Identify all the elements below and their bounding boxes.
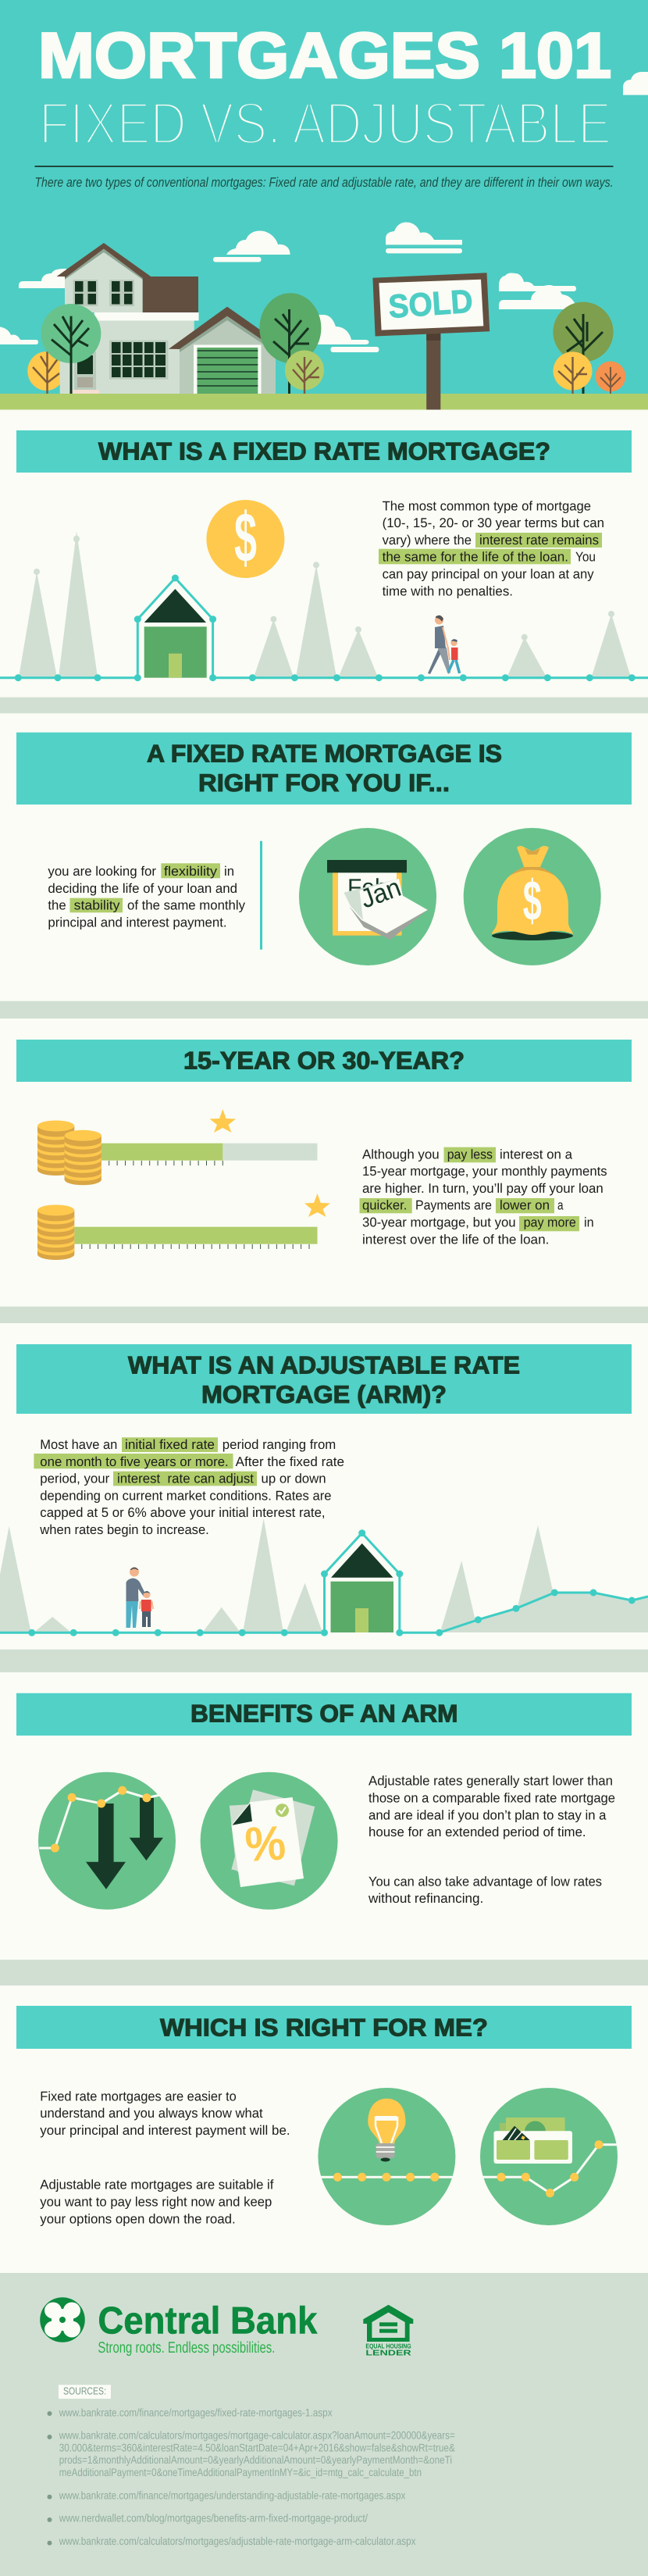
text: ARM benefits: without refinancing. [368, 1891, 483, 1906]
icon: percent document [201, 1772, 338, 1910]
text: fixed rate description: The most common type of mortgage [383, 498, 591, 513]
text: fixed vs adjustable advice [40, 2089, 290, 2226]
sources list: www.bankrate.com/finance/mortgages/fixed-rate-mortgages-1.aspx [59, 2406, 333, 2418]
icon: light bulb with flat line [318, 2088, 455, 2225]
text: ARM description: capped at 5 or 6% above your initial interest rate, [40, 1505, 326, 1520]
sources list: www.bankrate.com/finance/mortgages/understanding-adjustable-rate-mortgages.aspx [59, 2489, 405, 2501]
text: 15 vs 30 year comparison: interest on a [500, 1147, 573, 1161]
icon: star [209, 1109, 236, 1133]
ground [0, 394, 648, 409]
text: 15 vs 30 year comparison: are higher. In turn, you’ll pay off your loan [362, 1181, 603, 1196]
front door [73, 351, 99, 394]
text: fixed rate description: the same for the life of the loan. [383, 550, 568, 565]
panel: benefits of an ARM [16, 1693, 632, 1910]
text: ARM benefits: and are ideal if you don’t plan to stay in a [369, 1807, 607, 1822]
heading: WHICH IS RIGHT FOR ME? [160, 2014, 488, 2042]
icon: house [325, 1533, 400, 1632]
text: 15 vs 30 year comparison: interest over the life of the loan. [362, 1232, 549, 1247]
heading: MORTGAGE (ARM)? [201, 1380, 447, 1408]
icon: adult and child standing [126, 1567, 153, 1628]
text: ARM benefits [368, 1774, 615, 1906]
text: 15 vs 30 year comparison: quicker. [362, 1198, 407, 1213]
text: 15 vs 30 year comparison: in [584, 1215, 594, 1229]
text: fixed rate description: interest rate remains [479, 533, 599, 548]
text: fixed vs adjustable advice: you want to pay less right now and keep [40, 2195, 272, 2209]
icon: adult and child walking [428, 615, 460, 674]
panel: fixed rate is right for you if [16, 733, 632, 965]
panel: footer [0, 2273, 648, 2576]
icon: gold dollar coin: $ [234, 499, 257, 577]
text: fixed rate description: vary) where the [383, 533, 472, 548]
chart: adjustable rate line with peaks [0, 1518, 648, 1636]
heading: A FIXED RATE MORTGAGE IS [147, 740, 502, 768]
text: flexibility and stability: deciding the life of your loan and [48, 881, 237, 896]
chart: 30-year bar [37, 1193, 330, 1260]
lower window [109, 341, 168, 380]
text: 15 vs 30 year comparison: 30-year mortgage, but you [362, 1215, 516, 1229]
logo: equal housing lender [363, 2305, 413, 2357]
icon: wallet with adjustable line [480, 2088, 618, 2225]
sources list: www.bankrate.com/calculators/mortgages/mortgage-calculator.aspx?loanAmount=200000&years= [59, 2429, 455, 2442]
text: ARM description: initial fixed rate [125, 1437, 215, 1452]
title: MORTGAGES 101 [38, 20, 611, 91]
panel: what is an adjustable rate mortgage [0, 1344, 648, 1636]
heading: RIGHT FOR YOU IF... [198, 769, 450, 797]
sources list: www.bankrate.com/calculators/mortgages/adjustable-rate-mortgage-arm-calculator.aspx [59, 2535, 415, 2547]
text: ARM description: period ranging from [223, 1437, 336, 1452]
text: ARM description [34, 1437, 344, 1537]
sources list: prods=1&monthlyAdditionalAmount=0&yearlyAdditionalAmount=0&yearlyPaymentMonth=&oneTi [59, 2453, 452, 2466]
icon: star [304, 1193, 330, 1217]
tree: orange right [596, 361, 625, 394]
text: ARM benefits: Adjustable rates generally start lower than [369, 1774, 613, 1789]
upper windows [73, 280, 134, 306]
tree: yellow right [553, 351, 592, 394]
text: flexibility and stability: stability [74, 898, 120, 913]
icon: calendar: Jan [357, 872, 405, 915]
text: flexibility and stability [48, 863, 245, 929]
heading [16, 1344, 632, 1414]
text: fixed rate description: can pay principal on your loan at any [383, 567, 594, 581]
icon: coin stack [37, 1204, 74, 1260]
sold sign: SOLD [387, 283, 474, 325]
text: ARM benefits: house for an extended period of time. [369, 1825, 586, 1839]
sources list: www.nerdwallet.com/blog/mortgages/benefits-arm-fixed-mortgage-product/ [59, 2512, 368, 2524]
text: ARM description: interest rate can adjust [117, 1472, 254, 1486]
icon: money bag: $ [523, 869, 542, 933]
text: fixed vs adjustable advice: your principal and interest payment will be. [40, 2123, 290, 2138]
logo: Central Bank: Central Bank [98, 2299, 318, 2342]
chart: flat rate line with peaks [0, 531, 648, 681]
heading: 15-YEAR OR 30-YEAR? [183, 1047, 465, 1075]
text: flexibility and stability: of the same monthly [127, 898, 245, 913]
panel: which is right for me [16, 2006, 632, 2226]
text: ARM description: when rates begin to increase. [39, 1522, 209, 1537]
text: 15 vs 30 year comparison: Payments are [415, 1198, 492, 1213]
text: 15 vs 30 year comparison: 15-year mortgage, your monthly payments [362, 1164, 607, 1179]
heading [16, 2006, 632, 2049]
house [56, 243, 287, 394]
text: ARM description: period, your [40, 1472, 110, 1486]
heading: WHAT IS AN ADJUSTABLE RATE [128, 1351, 520, 1379]
chart: 15-year bar [37, 1109, 317, 1185]
text: flexibility and stability: the [48, 898, 66, 913]
clouds [0, 72, 648, 352]
sources label: SOURCES: [63, 2385, 106, 2397]
icon: calendar [299, 828, 436, 965]
text: 15 vs 30 year comparison: a [557, 1198, 564, 1213]
garage [169, 307, 287, 394]
heading [16, 1040, 632, 1082]
sources list: meAdditionalPayment=0&oneTimeAdditionalPaymentInMY=&ic_id=mtg_calc_calculate_btn [59, 2466, 422, 2478]
text: fixed vs adjustable advice: your options open down the road. [40, 2211, 236, 2226]
heading [16, 1693, 632, 1736]
icon: house [137, 578, 213, 678]
text: flexibility and stability: you are looking for [48, 864, 156, 879]
logo: Central Bank [40, 2297, 318, 2357]
icon: gold dollar coin [206, 499, 284, 578]
text: flexibility and stability: principal and interest payment. [48, 915, 227, 929]
tree: green right of garage [259, 293, 321, 394]
icon: money bag [464, 828, 601, 965]
panel: what is a fixed rate mortgage [0, 430, 648, 681]
tree: green left [41, 304, 101, 394]
text: ARM description: one month to five years or more. [40, 1454, 229, 1469]
text: ARM description: up or down [261, 1472, 326, 1486]
text: 15 vs 30 year comparison: pay more [524, 1215, 576, 1229]
heading: BENEFITS OF AN ARM [190, 1700, 458, 1728]
icon: coin stacks [37, 1120, 101, 1185]
text: ARM description: depending on current market conditions. Rates are [40, 1488, 332, 1503]
text: 15 vs 30 year comparison: pay less [447, 1147, 493, 1161]
tree: olive [553, 302, 614, 394]
text: fixed rate description [379, 498, 604, 598]
text: ARM benefits: those on a comparable fixed rate mortgage [369, 1790, 615, 1806]
logo: equal housing lender: LENDER [365, 2349, 412, 2357]
text: fixed rate description: time with no penalties. [383, 583, 513, 598]
heading: WHAT IS A FIXED RATE MORTGAGE? [98, 437, 550, 465]
text: fixed vs adjustable advice: Adjustable rate mortgages are suitable if [40, 2178, 274, 2192]
text: 15 vs 30 year comparison [359, 1147, 607, 1247]
icon: falling rate arrows [38, 1772, 176, 1910]
text: 15 vs 30 year comparison: lower on [500, 1198, 550, 1213]
text: fixed vs adjustable advice: Fixed rate mortgages are easier to [40, 2089, 237, 2103]
icon: calendar: Feb [347, 875, 388, 901]
panel: 15-year or 30-year [16, 1040, 632, 1260]
text: fixed rate description: (10-, 15-, 20- or 30 year terms but can [383, 516, 604, 530]
sources list: 30.000&terms=360&interestRate=4.50&loanStartDate=04+Apr+2016&show=false&showRt=true& [59, 2441, 455, 2453]
text: fixed vs adjustable advice: understand and you always know what [40, 2106, 263, 2121]
panel: header [0, 0, 648, 409]
text: 15 vs 30 year comparison: Although you [362, 1147, 440, 1161]
sold sign [372, 273, 490, 409]
tree: lime [285, 350, 324, 394]
text: flexibility and stability: in [224, 864, 234, 879]
logo: Central Bank: Strong roots. Endless possibilities. [98, 2339, 275, 2357]
text: ARM description: After the fixed rate [236, 1454, 344, 1469]
text: flexibility and stability: flexibility [164, 864, 218, 879]
text: fixed rate description: You [575, 550, 596, 565]
heading [16, 430, 632, 473]
heading [16, 733, 632, 805]
tree: yellow left [27, 351, 65, 394]
sources list [47, 2406, 455, 2547]
icon: percent document: % [244, 1816, 287, 1872]
logo: equal housing lender: EQUAL HOUSING [365, 2342, 411, 2350]
text: ARM benefits: You can also take advantage of low rates [369, 1874, 602, 1889]
text: ARM description: Most have an [40, 1437, 117, 1452]
